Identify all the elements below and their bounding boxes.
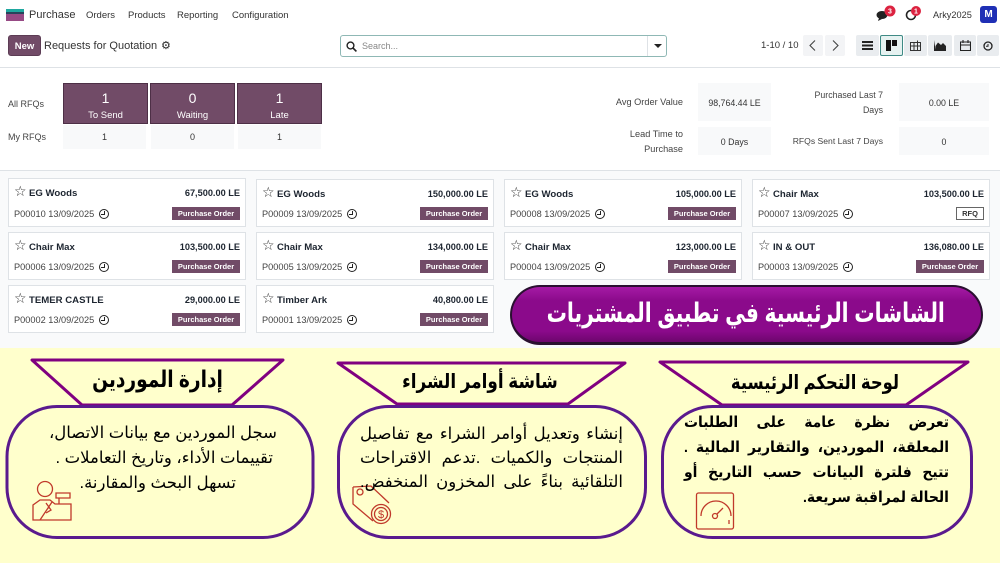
panel: main dashboard (662, 406, 972, 538)
card: P00008 (504, 179, 742, 227)
card: P00003: 136,080.00 LE (924, 242, 984, 252)
card: P00005: ☆ (262, 238, 275, 254)
calendar view (954, 35, 976, 56)
card: P00001: ☆ (262, 291, 275, 307)
card: P00006: 103,500.00 LE (180, 242, 240, 252)
my rfqs value: waiting (151, 125, 234, 149)
card: P00010: P00010 13/09/2025 (14, 209, 94, 219)
card: P00001: P00001 13/09/2025 (262, 315, 342, 325)
card: P00008: Purchase Order (674, 209, 730, 218)
view switcher buttons (856, 35, 999, 56)
card: P00009 (256, 179, 494, 227)
card: P00005: P00005 13/09/2025 (262, 262, 342, 272)
card: P00003: P00003 13/09/2025 (758, 262, 838, 272)
value: purchased last 7 days: 0.00 LE (929, 98, 959, 108)
icon: cashier person (33, 482, 71, 520)
card: P00009: 150,000.00 LE (428, 189, 488, 199)
value: lead time: 0 Days (721, 137, 748, 147)
card: P00008: P00008 13/09/2025 (510, 209, 590, 219)
pager next (825, 35, 845, 56)
label: lead time to purchase: Lead Time to Purchase (630, 129, 683, 154)
tile: waiting (150, 83, 235, 124)
value: avg order value: 98,764.44 LE (708, 98, 761, 108)
panel: supplier management (7, 406, 313, 538)
card: P00002: Purchase Order (178, 315, 234, 324)
tile: late: Late (270, 110, 289, 121)
row label: all rfqs: All RFQs (8, 99, 44, 109)
card: P00004: 123,000.00 LE (676, 242, 736, 252)
user name: Arky2025 (933, 10, 972, 20)
card: P00006: ☆ (14, 238, 27, 254)
page title: Requests for Quotation (44, 40, 157, 52)
icon: magnifier (346, 41, 357, 52)
card: P00009: EG Woods (277, 189, 325, 200)
tile: waiting: 0 (189, 90, 196, 106)
value: purchased last 7 days (899, 83, 989, 121)
heading: main dashboard: لوحة التحكم الرئيسية (731, 372, 899, 394)
card: P00006: Purchase Order (178, 262, 234, 271)
my rfqs value: late: 1 (277, 132, 282, 142)
my rfqs value: waiting: 0 (190, 132, 195, 142)
menu: configuration: Configuration (232, 10, 289, 21)
search placeholder: Search... (362, 41, 398, 51)
control panel bar (0, 30, 1000, 68)
card: P00009: P00009 13/09/2025 (262, 209, 342, 219)
label: avg order value: Avg Order Value (616, 97, 683, 107)
card: P00005: 134,000.00 LE (428, 242, 488, 252)
value: rfqs sent: 0 (942, 137, 946, 147)
section shapes: trapezoids and rounded panels (6, 358, 973, 539)
user avatar (980, 6, 997, 23)
card: P00001: Purchase Order (426, 315, 482, 324)
search box (340, 35, 667, 57)
icon: speedometer (696, 493, 734, 529)
text: supplier management (49, 424, 277, 492)
line 2: تقييمات الأداء، وتاريخ التعاملات . (55, 449, 273, 467)
menu: products: Products (128, 10, 166, 21)
label: rfqs sent last 7 days: RFQs Sent Last 7 Days (793, 136, 883, 146)
card: P00009: Purchase Order (426, 209, 482, 218)
app name: Purchase (29, 9, 75, 21)
row label: my rfqs: My RFQs (8, 132, 46, 142)
my rfqs value: late (238, 125, 321, 149)
card: P00007: Chair Max (773, 189, 819, 200)
heading: supplier management: إدارة الموردين (92, 366, 223, 392)
trapezoid: purchase orders (338, 363, 625, 404)
trapezoid: main dashboard (660, 362, 968, 405)
card: P00003: IN & OUT (773, 242, 815, 253)
graph view (928, 35, 952, 56)
menu: orders: Orders (86, 10, 115, 21)
pager previous (803, 35, 823, 56)
text: main dashboard (683, 414, 949, 506)
card: P00007: 103,500.00 LE (924, 189, 984, 199)
icon: settings gear: ⚙ (161, 39, 171, 52)
card: P00007: RFQ (962, 209, 978, 218)
card: P00008: EG Woods (525, 189, 573, 200)
card: P00008: ☆ (510, 185, 523, 201)
kanban view active (880, 35, 903, 56)
icon: price tag with dollar: $ (378, 509, 384, 521)
card: P00006 (8, 232, 246, 280)
card: P00001 (256, 285, 494, 333)
infographic yellow section (0, 348, 1000, 563)
line 2: المعلقة، الموردين، والتقارير المالية . (684, 439, 949, 456)
card: P00003: Purchase Order (922, 262, 978, 271)
card: P00007 (752, 179, 990, 227)
card: P00006: P00006 13/09/2025 (14, 262, 94, 272)
tile: to send: To Send (88, 110, 123, 121)
card: P00002: 29,000.00 LE (185, 295, 240, 305)
card: P00003: ☆ (758, 238, 771, 254)
icon: messages with badge: 3 (888, 8, 892, 16)
icon: messages with badge (876, 6, 896, 21)
label: purchased last 7 days: Purchased Last 7 Days (815, 90, 883, 114)
card: P00001: 40,800.00 LE (433, 295, 488, 305)
title banner (510, 285, 983, 345)
card: P00001: Timber Ark (277, 295, 327, 306)
card: P00005: Chair Max (277, 242, 323, 253)
card: P00007: P00007 13/09/2025 (758, 209, 838, 219)
line 3: التلقائية بناءً على المخزون المنخفض. (360, 473, 623, 491)
new button: New (15, 41, 34, 52)
tile: late: 1 (276, 90, 283, 106)
card: P00002: TEMER CASTLE (29, 295, 104, 306)
menu: reporting: Reporting (177, 10, 218, 21)
card: P00009: ☆ (262, 185, 275, 201)
my rfqs value: to send: 1 (102, 132, 107, 142)
icon: purchase app logo (6, 9, 24, 21)
list view (856, 35, 879, 56)
card: P00006: Chair Max (29, 242, 75, 253)
dropdown arrow (647, 36, 667, 56)
heading: purchase orders: شاشة أوامر الشراء (402, 371, 558, 393)
card: P00008: 105,000.00 LE (676, 189, 736, 199)
kanban area background (0, 171, 1000, 348)
panel: purchase orders (338, 406, 646, 538)
text: purchase orders (360, 422, 623, 491)
new button (8, 35, 41, 56)
card: P00002 (8, 285, 246, 333)
card: P00007: ☆ (758, 185, 771, 201)
card: P00010 (8, 178, 246, 227)
card: P00005: Purchase Order (426, 262, 482, 271)
line 3: تتيح فلترة البيانات حسب التاريخ أو (684, 464, 949, 481)
icon: price tag with dollar (353, 486, 390, 524)
line 1: إنشاء وتعديل أوامر الشراء مع تفاصيل (360, 425, 623, 443)
tile: to send (63, 83, 148, 124)
value: rfqs sent (899, 127, 989, 155)
card: P00002: P00002 13/09/2025 (14, 315, 94, 325)
activity view (977, 35, 999, 56)
card: P00010: EG Woods (29, 188, 77, 199)
card: P00004: P00004 13/09/2025 (510, 262, 590, 272)
trapezoid: supplier management (32, 360, 283, 405)
card: P00010: 67,500.00 LE (185, 188, 240, 198)
card: P00003 (752, 232, 990, 280)
card: P00004: Chair Max (525, 242, 571, 253)
card: P00002: ☆ (14, 291, 27, 307)
card: P00004: ☆ (510, 238, 523, 254)
icon: activities with badge: 1 (914, 8, 918, 16)
card: P00005 (256, 232, 494, 280)
pager: 1-10 / 10 (761, 40, 798, 51)
top navigation bar (6, 6, 997, 23)
tile: to send: 1 (102, 90, 109, 106)
tile: waiting: Waiting (177, 110, 208, 121)
value: avg order value (698, 83, 771, 121)
line 2: المنتجات والكميات .تدعم الاقتراحات (360, 449, 623, 467)
value: lead time (698, 127, 771, 155)
line 3: تسهل البحث والمقارنة. (79, 474, 236, 492)
icon: activities with badge (906, 6, 921, 20)
line 4: الحالة لمراقبة سريعة. (803, 489, 949, 506)
pivot view (904, 35, 927, 56)
title text: الشاشات الرئيسية في تطبيق المشتريات (547, 298, 945, 328)
user avatar: M (984, 9, 993, 20)
card: P00004 (504, 232, 742, 280)
card: P00004: Purchase Order (674, 262, 730, 271)
tile: late (237, 83, 322, 124)
card: P00010: ☆ (14, 184, 27, 200)
dashboard panel (0, 68, 1000, 171)
card: P00010: Purchase Order (178, 209, 234, 218)
my rfqs value: to send (63, 125, 146, 149)
line 1: سجل الموردين مع بيانات الاتصال، (49, 424, 277, 442)
line 1: تعرض نظرة عامة على الطلبات (684, 414, 949, 431)
